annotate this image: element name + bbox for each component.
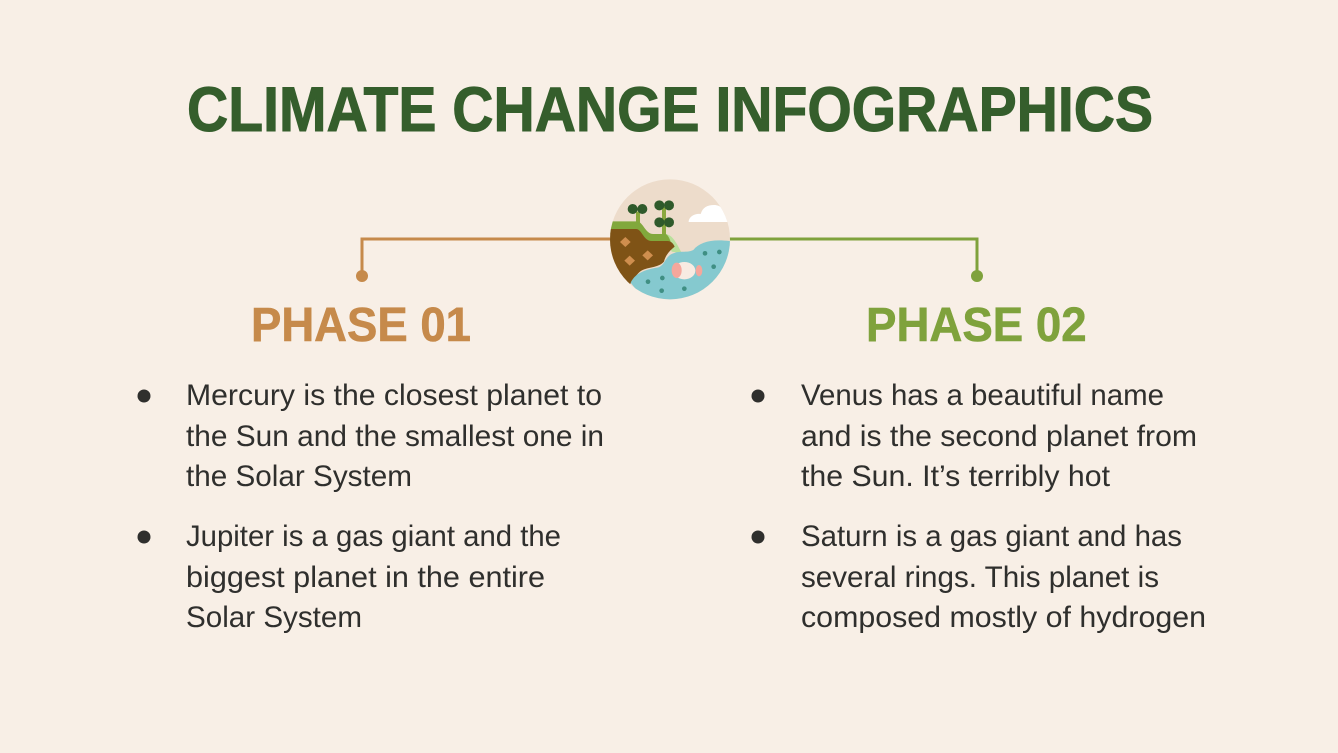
text block: Saturn bbox=[752, 520, 1206, 634]
icon: cloud bbox=[689, 205, 729, 222]
icon: climate landscape circle bbox=[610, 180, 730, 300]
text block: Venus: the Sun. It’s terribly hot bbox=[801, 460, 1111, 493]
grass bbox=[610, 221, 671, 242]
icon: fish bbox=[672, 262, 702, 279]
text block: Mercury: the Sun and the smallest one in bbox=[186, 420, 604, 453]
light green slope bbox=[666, 234, 681, 252]
text block: Jupiter: biggest planet in the entire bbox=[186, 561, 545, 594]
heading: phase 01: PHASE 01 bbox=[251, 298, 471, 351]
text block: Mercury bbox=[138, 379, 604, 493]
title: CLIMATE CHANGE INFOGRAPHICS bbox=[187, 74, 1153, 145]
text block: Saturn: Saturn is a gas giant and has bbox=[801, 520, 1182, 553]
text block: Jupiter bbox=[138, 520, 561, 634]
text block: Mercury: the Solar System bbox=[186, 460, 412, 493]
connector: phase 02 bbox=[728, 239, 983, 282]
soil stones bbox=[620, 237, 653, 266]
text block: Jupiter: Solar System bbox=[186, 601, 362, 634]
text block: Jupiter: Jupiter is a gas giant and the bbox=[186, 520, 561, 553]
connector: phase 01 bbox=[356, 239, 612, 282]
water dots bbox=[646, 250, 722, 293]
text block: Saturn: composed mostly of hydrogen bbox=[801, 601, 1206, 634]
heading: phase 02: PHASE 02 bbox=[866, 298, 1087, 351]
soil bbox=[610, 229, 675, 284]
text block: Venus bbox=[752, 379, 1197, 493]
text block: Venus: Venus has a beautiful name bbox=[801, 379, 1164, 412]
icon: sprouts bbox=[628, 200, 674, 237]
text block: Mercury: Mercury is the closest planet to bbox=[186, 379, 602, 412]
water bbox=[631, 240, 733, 303]
text block: Venus: and is the second planet from bbox=[801, 420, 1197, 453]
text block: Saturn: several rings. This planet is bbox=[801, 561, 1159, 594]
